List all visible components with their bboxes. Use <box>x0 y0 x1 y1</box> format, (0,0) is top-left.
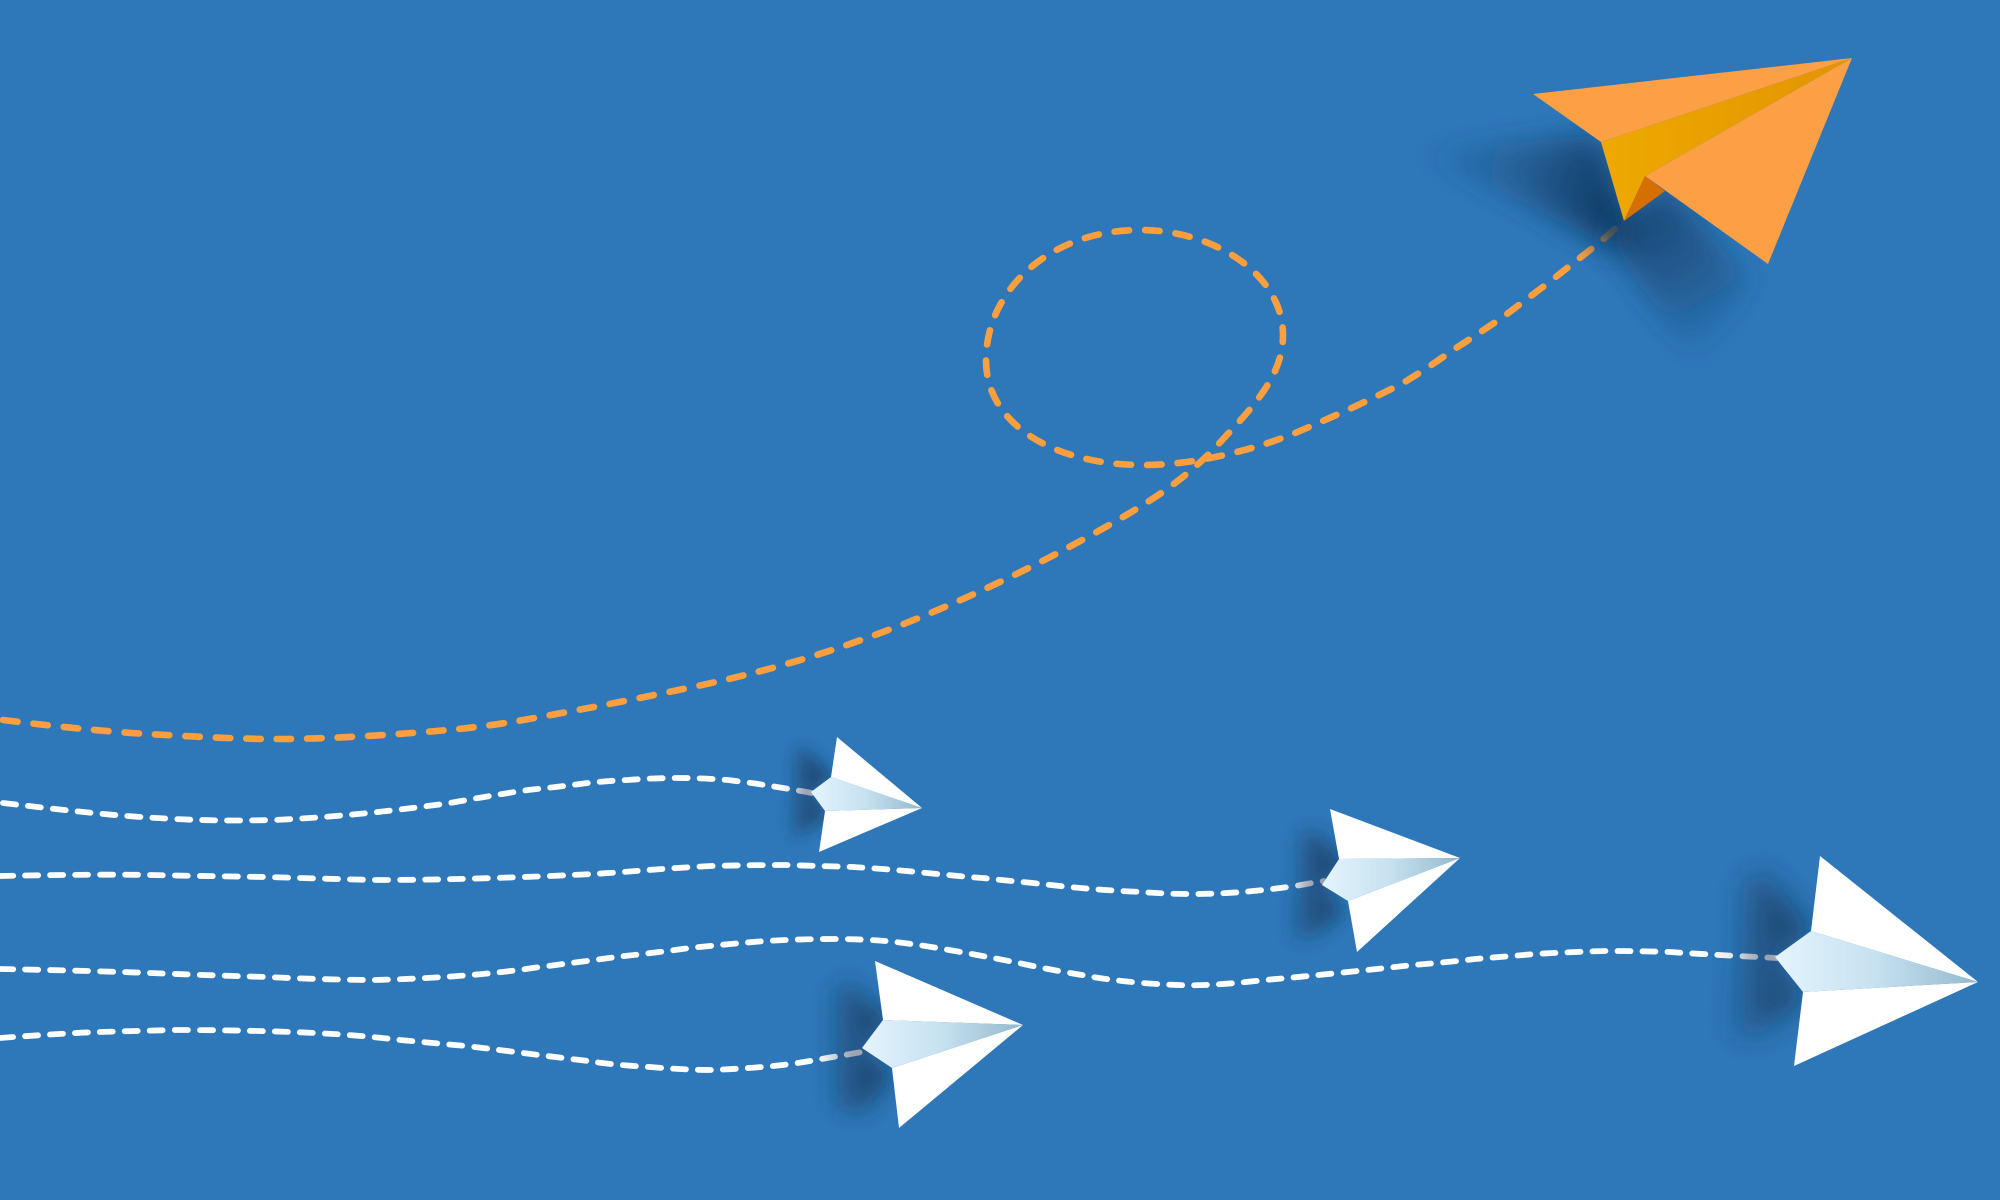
shadow: orange plane <box>1410 135 1750 365</box>
orange plane: dark inner fold <box>1624 176 1665 221</box>
dashed flight path: white plane 3 <box>0 939 1777 985</box>
plane: white 3 <box>1730 856 1978 1066</box>
dashed flight path: white plane 4 <box>0 1030 862 1070</box>
orange plane: right wing <box>1645 58 1852 264</box>
dashed flight path: orange loop <box>3 222 1622 739</box>
dashed flight path: white plane 2 <box>0 865 1324 894</box>
orange plane: left wing <box>1533 58 1852 142</box>
dashed flight path: white plane 1 <box>3 778 812 820</box>
plane: white 2 <box>1290 809 1460 952</box>
plane: orange leader <box>1410 58 1852 365</box>
orange plane: centre fold <box>1601 58 1852 221</box>
plane: white 4 <box>830 961 1023 1128</box>
plane: white 1 <box>788 737 922 852</box>
